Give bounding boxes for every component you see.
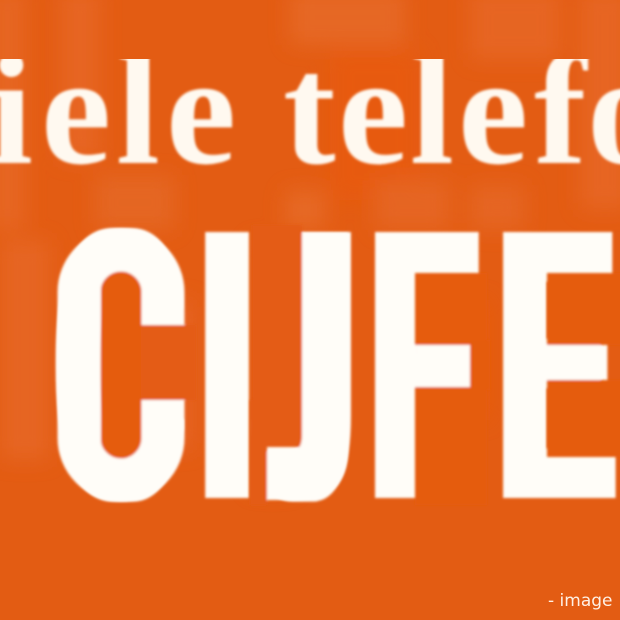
- big word: CIJFE: CIJFE: [59, 156, 612, 574]
- caption: image label: - image: [548, 591, 612, 611]
